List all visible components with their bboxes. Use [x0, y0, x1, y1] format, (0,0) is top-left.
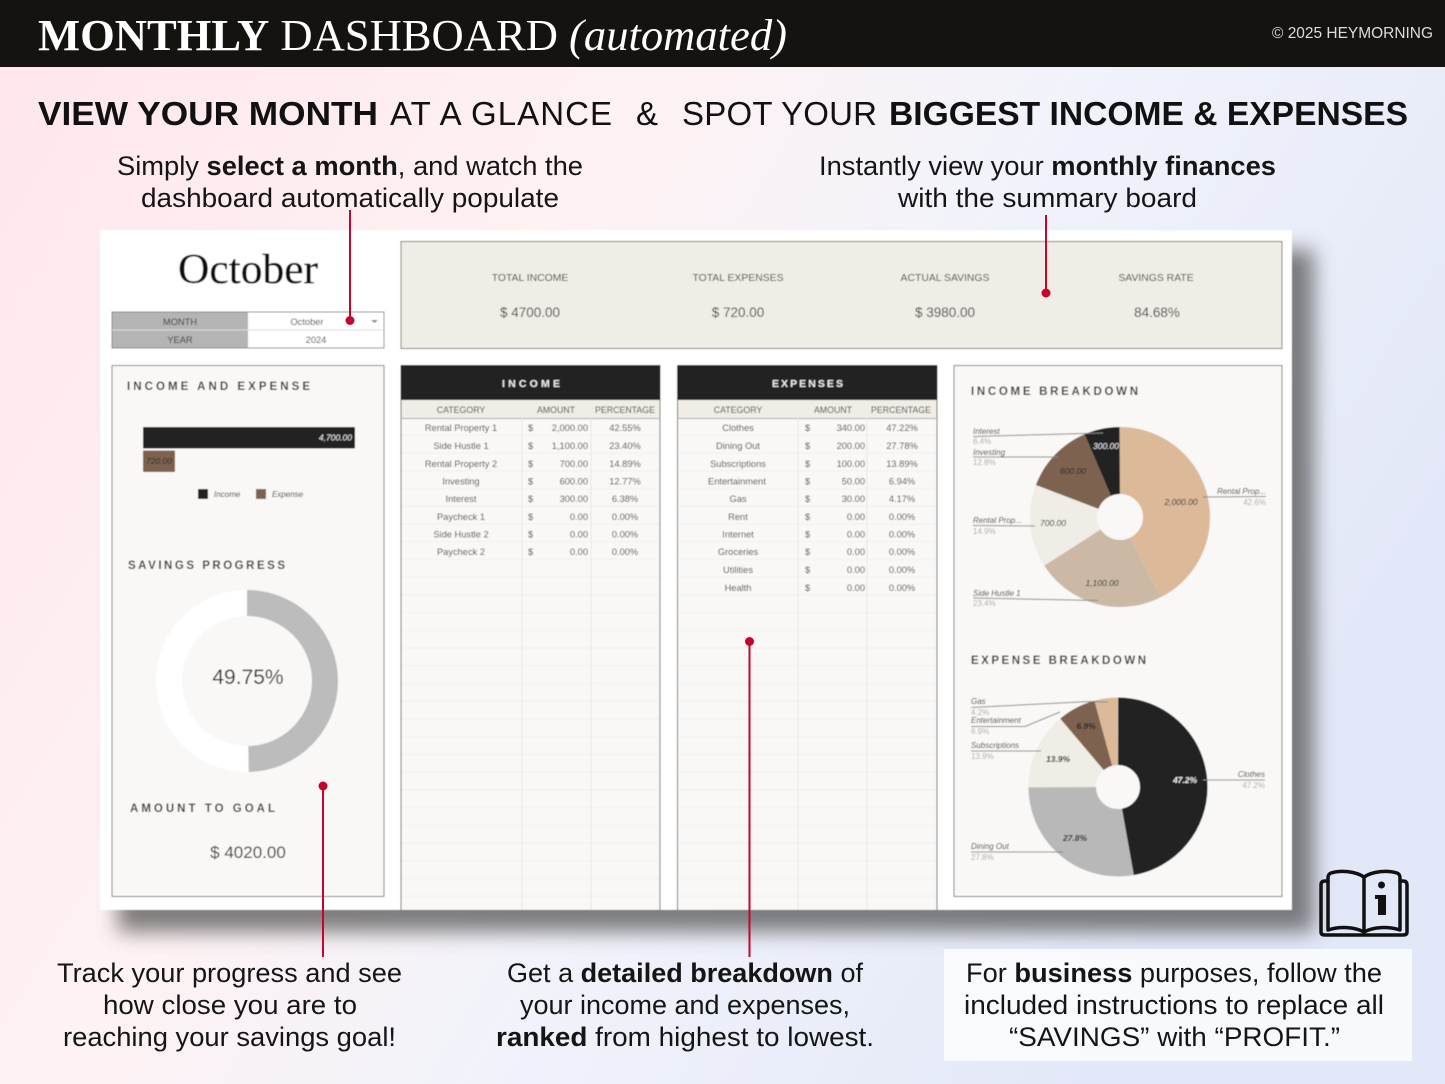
arrow: select month pointer [346, 210, 354, 325]
panel: income table: $ [528, 476, 534, 486]
pie chart: expense breakdown: 27.8% [971, 853, 994, 862]
panel: summary board: TOTAL EXPENSES [692, 273, 784, 284]
panel: expenses table: $ [805, 512, 811, 522]
panel: income table: Side Hustle 2 [433, 530, 489, 540]
bar chart [143, 427, 355, 499]
month name: October [178, 247, 318, 293]
panel: expenses table: Clothes [722, 423, 754, 433]
panel: expenses table: Utilities [723, 565, 753, 575]
panel: income table: Rental Property 1 [425, 423, 497, 433]
panel: expenses table: 0.00 [847, 547, 865, 557]
bar chart: 4,700.00 [319, 432, 352, 442]
panel: expenses table: $ [805, 565, 811, 575]
panel: summary board: $ 4700.00 [500, 305, 560, 320]
month and year selector: 2024 [306, 335, 326, 345]
callout: select a month [117, 151, 583, 213]
panel: expenses table: 100.00 [837, 459, 865, 469]
panel: income and expense, savings [112, 366, 384, 896]
panel: expenses table: 0.00 [847, 583, 865, 593]
panel: expenses table: 0.00% [889, 583, 915, 593]
pie chart: income breakdown: 14.9% [973, 527, 996, 536]
panel: income table: $ [528, 547, 534, 557]
callout: business note: “SAVINGS” with “PROFIT.” [1009, 1022, 1340, 1052]
dashboard [100, 230, 1292, 910]
panel: income table: 0.00 [570, 547, 588, 557]
pie chart: expense breakdown: 6.9% [1076, 721, 1096, 731]
panel: expenses table: $ [805, 583, 811, 593]
pie chart: income breakdown: Side Hustle 1 [973, 589, 1021, 598]
pie chart: expense breakdown: 6.9% [971, 727, 989, 736]
panel: income and expense, savings: $ 4020.00 [210, 843, 286, 862]
panel: income table: 0.00% [612, 547, 638, 557]
panel: income table: 1,100.00 [552, 441, 588, 451]
panel: summary board: 84.68% [1134, 305, 1180, 320]
donut chart: savings progress: 49.75% [212, 666, 284, 689]
callout: detailed breakdown: ranked from highest to lowest. [496, 1022, 874, 1052]
panel: income table: $ [528, 423, 534, 433]
panel: income table: $ [528, 530, 534, 540]
panel: summary board: TOTAL INCOME [492, 273, 568, 284]
pie chart: income breakdown: Interest [973, 427, 1000, 436]
panel: income and expense, savings: AMOUNT TO GOAL [130, 803, 275, 815]
panel: income table: PERCENTAGE [595, 405, 655, 415]
subtitle heading: SPOT YOUR [682, 95, 877, 132]
panel: expenses table: 6.94% [889, 476, 915, 486]
pie chart: income breakdown: 42.6% [1243, 498, 1266, 507]
pie chart: expense breakdown: 27.8% [1062, 833, 1087, 843]
header bar [0, 0, 1445, 67]
panel: summary board: $ 720.00 [712, 305, 764, 320]
panel: expenses table: Groceries [718, 547, 758, 557]
panel: income table: 600.00 [560, 476, 588, 486]
subtitle heading: & [636, 95, 658, 132]
panel: expenses table: $ [805, 530, 811, 540]
panel: income table: $ [528, 459, 534, 469]
dashboard shadow [118, 250, 1314, 932]
pie chart: income breakdown: 300.00 [1093, 441, 1119, 451]
panel: income and expense, savings: INCOME AND EXPENSE [127, 381, 310, 393]
pie chart: expense breakdown: Gas [971, 697, 986, 706]
panel: income table: Paycheck 1 [437, 512, 485, 522]
panel: income table: 2,000.00 [552, 423, 588, 433]
callout: track progress: Track your progress and see [57, 958, 402, 988]
panel: income table: Rental Property 2 [425, 459, 497, 469]
panel: income table: 300.00 [560, 494, 588, 504]
callout: track progress: how close you are to [103, 990, 357, 1020]
callout: business note [944, 949, 1412, 1061]
panel: expenses table: 13.89% [886, 459, 918, 469]
panel: income table: $ [528, 441, 534, 451]
bar chart: 720.00 [146, 456, 172, 466]
panel: summary board: $ 3980.00 [915, 305, 975, 320]
pie chart: expense breakdown: Clothes [1238, 770, 1265, 779]
panel: income and expense, savings: SAVINGS PROGRESS [128, 560, 285, 572]
panel: income table: 0.00 [570, 530, 588, 540]
pie chart: expense breakdown: Subscriptions [971, 741, 1019, 750]
pie chart: income breakdown: 2,000.00 [1163, 497, 1198, 507]
panel: expenses table: EXPENSES [772, 378, 843, 390]
panel: expenses table: 27.78% [886, 441, 918, 451]
pie chart: income breakdown: 6.4% [973, 437, 991, 446]
panel: breakdown charts [954, 366, 1282, 896]
callout: select a month: dashboard automatically populate [141, 183, 559, 213]
panel: expenses table: 0.00 [847, 530, 865, 540]
panel: expenses table: $ [805, 547, 811, 557]
panel: expenses table: 30.00 [842, 494, 865, 504]
callout: select a month: Simply select a month, and watch the [117, 151, 583, 181]
callout: business note: included instructions to replace all [964, 990, 1384, 1020]
panel: income table: AMOUNT [537, 405, 576, 415]
panel: expenses table: 200.00 [837, 441, 865, 451]
panel: expenses table: 50.00 [842, 476, 865, 486]
pie chart: income breakdown: 12.8% [973, 458, 996, 467]
pie chart: income breakdown: 23.4% [973, 599, 996, 608]
copyright: © 2025 HEYMORNING [1272, 25, 1433, 42]
panel: expenses table: $ [805, 459, 811, 469]
callout: detailed breakdown: Get a detailed breakdown of [507, 958, 863, 988]
month and year selector: October [290, 317, 324, 327]
panel: expenses table: Entertainment [708, 476, 766, 486]
panel: summary board [401, 242, 1282, 348]
bar chart: Income [214, 490, 241, 499]
panel: expenses table: $ [805, 494, 811, 504]
pie chart: expense breakdown: Dining Out [971, 842, 1010, 851]
panel: income table: 0.00% [612, 530, 638, 540]
panel: income table: Side Hustle 1 [433, 441, 489, 451]
pie chart: income breakdown: Rental Prop... [1217, 487, 1266, 496]
panel: income table: INCOME [502, 378, 560, 390]
panel: breakdown charts: EXPENSE BREAKDOWN [971, 655, 1146, 667]
panel: breakdown charts: INCOME BREAKDOWN [971, 386, 1138, 398]
panel: expenses table: Internet [722, 530, 754, 540]
callout: business note: For business purposes, follow the [966, 958, 1382, 988]
pie chart: income breakdown: 1,100.00 [1085, 578, 1119, 588]
panel: income table: CATEGORY [437, 405, 485, 415]
panel: income table: 23.40% [609, 441, 641, 451]
panel: income table: 700.00 [560, 459, 588, 469]
panel: expenses table: 340.00 [837, 423, 865, 433]
panel: expenses table: 0.00 [847, 512, 865, 522]
bar chart: Expense [272, 490, 304, 499]
callout: monthly finances: Instantly view your monthly finances [819, 151, 1276, 181]
month and year selector: YEAR [167, 335, 193, 345]
panel: expenses table: 0.00% [889, 565, 915, 575]
panel: summary board: ACTUAL SAVINGS [901, 273, 990, 284]
pie chart: expense breakdown: 4.2% [971, 708, 989, 717]
panel: expenses table: Health [725, 583, 751, 593]
panel: expenses table: 0.00% [889, 512, 915, 522]
panel: expenses table: 0.00% [889, 530, 915, 540]
panel: income table: 0.00 [570, 512, 588, 522]
panel: expenses table: $ [805, 476, 811, 486]
panel: income table: 0.00% [612, 512, 638, 522]
panel: income table: $ [528, 512, 534, 522]
pie chart: expense breakdown: Entertainment [971, 716, 1022, 725]
subtitle heading [38, 95, 1408, 132]
panel: expenses table: Rent [728, 512, 748, 522]
month and year selector [112, 312, 384, 348]
arrow: summary board pointer [1042, 215, 1050, 298]
panel: expenses table: PERCENTAGE [871, 405, 931, 415]
pie chart: income breakdown: 600.00 [1060, 466, 1086, 476]
panel: income table: 12.77% [609, 476, 641, 486]
pie chart: expense breakdown: 13.9% [971, 752, 994, 761]
panel: expenses table [677, 365, 937, 910]
panel: income table: Interest [445, 494, 477, 504]
panel: income table: Paycheck 2 [437, 547, 485, 557]
panel: income table: 14.89% [609, 459, 641, 469]
panel: expenses table: Subscriptions [710, 459, 766, 469]
subtitle heading: VIEW YOUR MONTH [38, 95, 378, 132]
subtitle heading: AT A GLANCE [390, 95, 612, 132]
panel: expenses table: 4.17% [889, 494, 915, 504]
callout: track progress: reaching your savings goal! [63, 1022, 396, 1052]
panel: expenses table: 47.22% [886, 423, 918, 433]
callout: monthly finances: with the summary board [897, 183, 1197, 213]
panel: expenses table: 0.00% [889, 547, 915, 557]
panel: income table: 42.55% [609, 423, 641, 433]
panel: expenses table: CATEGORY [714, 405, 762, 415]
panel: expenses table: AMOUNT [814, 405, 853, 415]
callout: monthly finances [819, 151, 1276, 213]
title: MONTHLY DASHBOARD (automated) [38, 11, 787, 60]
panel: income table: 6.38% [612, 494, 638, 504]
panel: expenses table: $ [805, 423, 811, 433]
pie chart: expense breakdown: 47.2% [1242, 781, 1265, 790]
panel: summary board: SAVINGS RATE [1118, 273, 1194, 284]
donut chart: savings progress [169, 603, 325, 759]
pie chart: expense breakdown: 47.2% [1172, 775, 1197, 785]
callout: detailed breakdown [496, 958, 874, 1052]
panel: income table: Investing [442, 476, 480, 486]
subtitle heading: BIGGEST INCOME & EXPENSES [889, 95, 1408, 132]
panel: income table: $ [528, 494, 534, 504]
arrow: savings pointer [318, 782, 328, 957]
callout: detailed breakdown: your income and expenses, [520, 990, 850, 1020]
pie chart: income breakdown: 700.00 [1040, 518, 1066, 528]
pie chart: income breakdown: Rental Prop... [973, 516, 1022, 525]
pie chart: expense breakdown [971, 697, 1265, 862]
panel: expenses table: $ [805, 441, 811, 451]
callout: track progress [57, 958, 402, 1052]
arrow: tables pointer [745, 637, 754, 957]
panel: expenses table: Gas [729, 494, 747, 504]
panel: expenses table: 0.00 [847, 565, 865, 575]
pie chart: expense breakdown: 13.9% [1046, 754, 1070, 764]
month and year selector: MONTH [163, 317, 197, 327]
pie chart: income breakdown: Investing [973, 448, 1006, 457]
panel: expenses table: Dining Out [716, 441, 760, 451]
pie chart: income breakdown [973, 427, 1266, 608]
icon: instruction book [1321, 871, 1407, 935]
panel: income table [401, 365, 660, 910]
